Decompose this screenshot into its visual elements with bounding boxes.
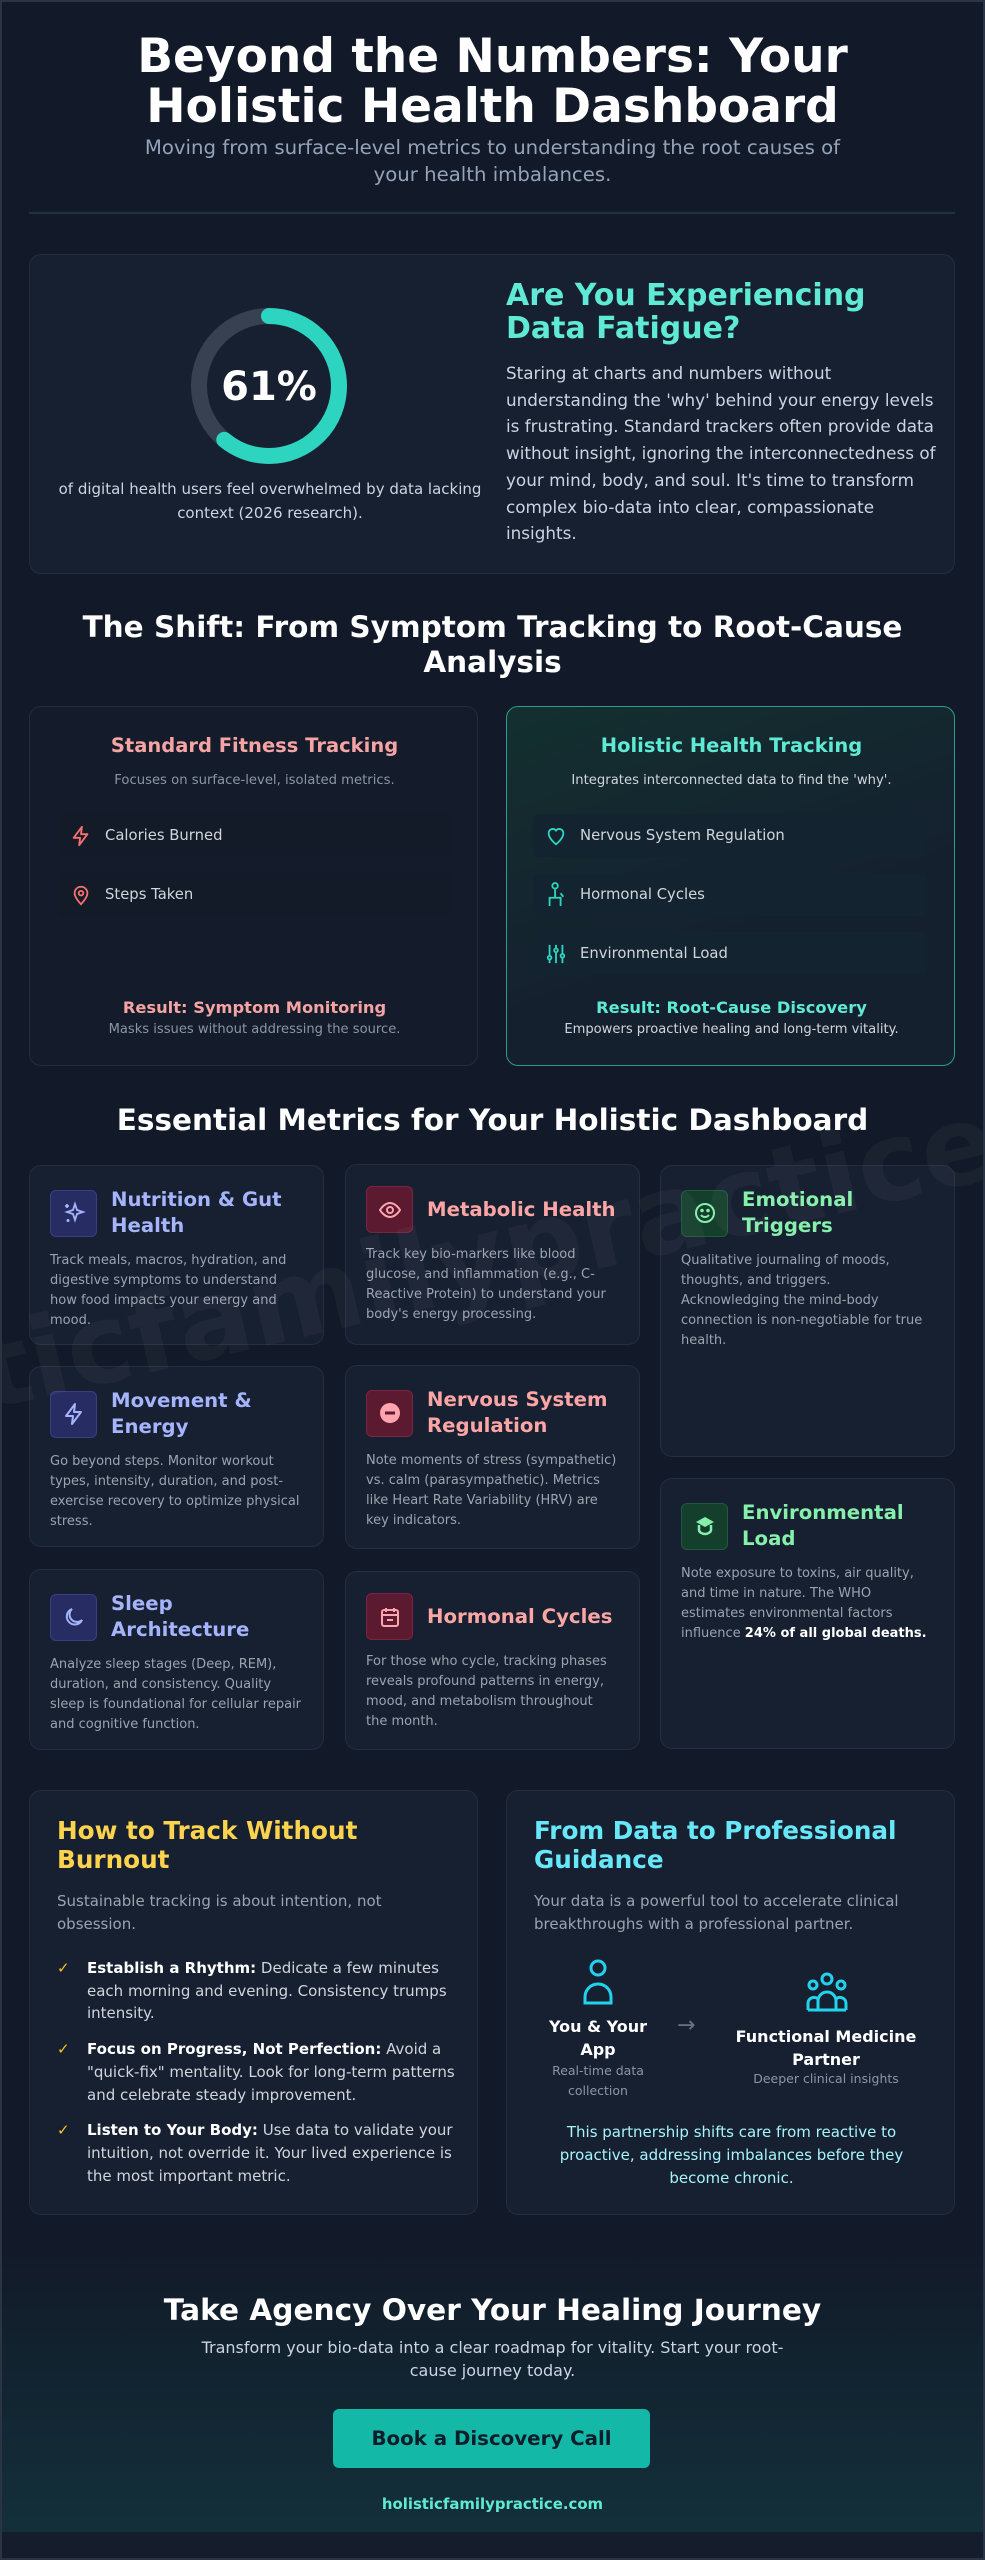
panel: holistic health tracking: [506, 706, 955, 1066]
button: Book a Discovery Call: [371, 2427, 612, 2450]
heading: the shift: [82, 610, 902, 679]
website: holisticfamilypractice.com: [382, 2495, 603, 2513]
result: Result: Root-Cause Discovery: [596, 998, 867, 1017]
icon: group: [806, 1972, 848, 2012]
panel: data to professional guidance: Real-time data collection: [552, 2063, 644, 2098]
label: functional medicine partner: Functional Medicine Partner: [736, 2027, 916, 2069]
panel: holistic health tracking: Integrates interconnected data to find the 'why'.: [571, 773, 892, 788]
panel: data to professional guidance: Your data is a powerful tool to accelerate clinical breakthroughs with a professional partner.: [534, 1892, 899, 1933]
title: Beyond the Numbers: Your: [137, 29, 848, 84]
item: steps: [58, 873, 452, 916]
checklist: Focus on Progress, Not Perfection: Avoid a "quick-fix" mentality. Look for long-term patterns and celebrate steady improvement.: [87, 2040, 455, 2104]
item: nervous system: Nervous System Regulation: [580, 827, 785, 844]
panel: standard fitness tracking: [29, 706, 478, 1066]
panel: data to professional guidance: Deeper clinical insights: [753, 2071, 899, 2086]
heading: the shift: Analysis: [423, 645, 562, 679]
CTA section: [2, 2250, 983, 2532]
card: sleep: [29, 1569, 324, 1750]
card: environmental: [660, 1478, 955, 1749]
card: emotional: Emotional Triggers: [742, 1188, 853, 1237]
title: [137, 29, 848, 134]
card: emotional: Qualitative journaling of moods, thoughts, and triggers.: [681, 1253, 890, 1288]
heading: Are You Experiencing Data Fatigue?: [506, 278, 866, 346]
checklist: ✓: [57, 2040, 70, 2058]
panel: holistic health tracking: Holistic Health Tracking: [601, 734, 862, 757]
item: environmental: [533, 932, 927, 975]
button: [333, 2409, 650, 2468]
checklist: ✓: [57, 1959, 70, 1977]
card: environmental: Note exposure to toxins, air quality, and time in nature. The WHO estimates environmental factors influence 24% of all global deaths.: [681, 1566, 927, 1641]
item: hormonal: [533, 873, 927, 916]
item: steps: Steps Taken: [105, 886, 193, 903]
item: environmental: Environmental Load: [580, 945, 728, 962]
heading: the shift: The Shift: From Symptom Tracking to Root-Cause: [83, 610, 902, 644]
card: nutrition: Track meals, macros, hydration, and digestive symptoms to understand how food impacts your energy and mood.: [50, 1253, 286, 1328]
panel: standard fitness tracking: Masks issues without addressing the source.: [109, 1022, 400, 1037]
card: movement: Go beyond steps. Monitor workout types, intensity, duration, and post-exercise recovery to optimize physical stress.: [50, 1454, 299, 1529]
donut caption: of digital health users feel overwhelmed by data lacking context (2026 research).: [59, 480, 481, 522]
checklist: Listen to Your Body: Use data to validate your intuition, not override it. Your lived experience is the most important metric.: [87, 2121, 453, 2185]
card: metabolic: Metabolic Health: [427, 1198, 616, 1220]
heading: essential metrics: Essential Metrics for Your Holistic Dashboard: [117, 1103, 868, 1137]
card: environmental: Environmental Load: [742, 1501, 904, 1550]
card: nervous system: [345, 1365, 640, 1549]
panel: data fatigue: [29, 254, 955, 574]
card: nutrition: [29, 1165, 324, 1345]
card: sleep: Sleep Architecture: [111, 1592, 249, 1641]
card: hormonal: For those who cycle, tracking phases reveals profound patterns in energy, mood, and metabolism throughout the month.: [366, 1654, 607, 1729]
panel: how to track without burnout: How to Track Without Burnout: [57, 1816, 357, 1874]
arrow: →: [677, 2013, 695, 2038]
donut chart 61%: [191, 308, 347, 464]
panel: data to professional guidance: [506, 1790, 955, 2215]
checklist: ✓: [57, 2121, 70, 2139]
card: metabolic: [345, 1164, 640, 1345]
card: nervous system: Note moments of stress (sympathetic) vs. calm (parasympathetic). Metrics like Heart Rate Variability (HRV) are key indicators.: [366, 1453, 616, 1528]
CTA text: Transform your bio-data into a clear roadmap for vitality. Start your root-cause journey today.: [202, 2338, 783, 2380]
item: hormonal: Hormonal Cycles: [580, 886, 705, 903]
panel: data to professional guidance: From Data to Professional Guidance: [534, 1816, 897, 1874]
CTA heading: Take Agency Over Your Healing Journey: [164, 2293, 821, 2327]
card: hormonal: Hormonal Cycles: [427, 1604, 612, 1628]
subtitle: Moving from surface-level metrics to understanding the root causes of your health imbalances.: [145, 136, 840, 186]
result: Result: Symptom Monitoring: [123, 998, 386, 1017]
panel: standard fitness tracking: Standard Fitness Tracking: [111, 734, 398, 757]
body text: Staring at charts and numbers without understanding the 'why' behind your energy levels is frustrating. Standard trackers often provide data without insight, ignoring the interconnectedness of your mind, body, and soul. It's time to transform complex bio-data into clear, compassionate insights.: [506, 363, 936, 543]
card: emotional: Acknowledging the mind-body connection is non-negotiable for true health.: [681, 1293, 922, 1348]
panel: how to track without burnout: [29, 1790, 478, 2215]
title: Holistic Health Dashboard: [146, 79, 839, 134]
donut chart 61%: 61%: [221, 364, 317, 410]
card: hormonal: [345, 1571, 640, 1750]
checklist: [57, 1959, 455, 2185]
item: calories: Calories Burned: [105, 827, 223, 844]
item: calories: [58, 814, 452, 857]
card: emotional: [660, 1165, 955, 1457]
icon: person: [584, 1960, 612, 2004]
partnership note: This partnership shifts care from reactive to proactive, addressing imbalances before they become chronic.: [560, 2123, 903, 2187]
card: movement: Movement & Energy: [111, 1389, 252, 1438]
card: metabolic: Track key bio-markers like blood glucose, and inflammation (e.g., C-Reactive Protein) to understand your body's energy processing.: [366, 1247, 606, 1322]
card: sleep: Analyze sleep stages (Deep, REM), duration, and consistency. Quality sleep is foundational for cellular repair and cognitive function.: [50, 1657, 301, 1732]
panel: standard fitness tracking: Focuses on surface-level, isolated metrics.: [114, 773, 395, 788]
label: you & your app: You & Your App: [549, 2017, 647, 2059]
panel: how to track without burnout: Sustainable tracking is about intention, not obsession.: [57, 1892, 382, 1933]
card: nutrition: Nutrition & Gut Health: [111, 1188, 282, 1237]
panel: holistic health tracking: Empowers proactive healing and long-term vitality.: [564, 1022, 899, 1037]
item: nervous system: [533, 814, 927, 857]
checklist: Establish a Rhythm: Dedicate a few minutes each morning and evening. Consistency trumps intensity.: [87, 1959, 447, 2022]
card: movement: [29, 1366, 324, 1547]
card: nervous system: Nervous System Regulation: [427, 1388, 608, 1437]
